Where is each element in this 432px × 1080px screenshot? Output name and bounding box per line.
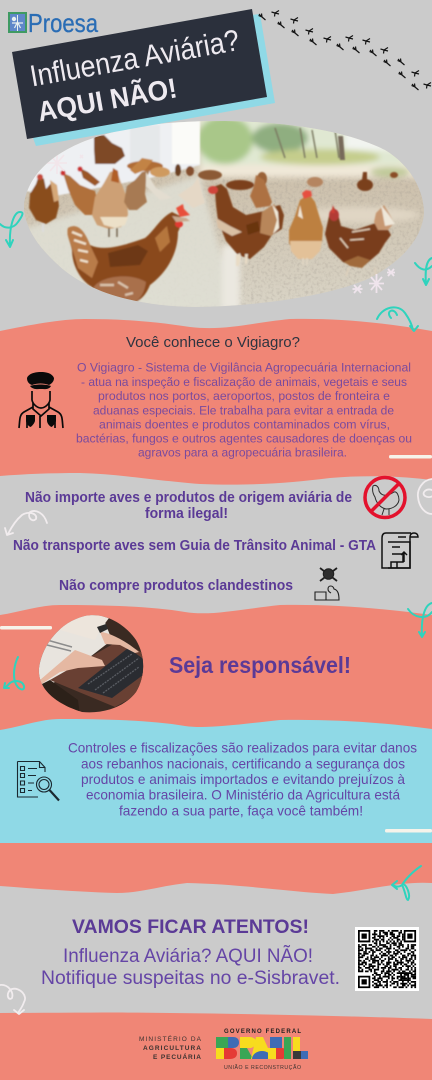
large hen	[67, 212, 181, 305]
building	[20, 118, 200, 196]
warning: do not import: forma ilegal!	[145, 506, 228, 522]
tan front hen	[288, 196, 324, 246]
left hen	[29, 175, 59, 224]
QR code	[355, 927, 419, 991]
text block: Vigiagro description: agravos para a agropecuária brasileira.	[138, 445, 347, 459]
photo: hens on a farm	[20, 116, 430, 310]
call to action text: Influenza Aviária? AQUI NÃO!	[63, 945, 313, 967]
band: cyan control panel	[0, 719, 432, 843]
logo wordmark: Proesa	[28, 8, 98, 38]
hen two	[63, 173, 99, 215]
text block: Vigiagro description: bactérias, fungos e outros agentes causadores de doenças ou	[76, 431, 412, 445]
text block: Vigiagro description: - atua na inspeção e fiscalização de animais, vegetais e seus	[81, 375, 407, 389]
decorative teal and white squiggles	[0, 212, 432, 1014]
sparkles on the photo	[48, 154, 84, 174]
icon: officer	[19, 372, 63, 428]
text block: controls description: produtos e animais importados e evitando prejuízos à	[81, 771, 405, 787]
white accent bar	[389, 455, 432, 458]
icon: prohibited chicken	[365, 478, 405, 518]
ministry wordmark: AGRICULTURA	[143, 1045, 201, 1052]
ministry wordmark	[139, 1034, 202, 1061]
white accent bar	[0, 626, 52, 630]
text block: controls description: aos rebanhos nacionais, certificando a segurança dos	[81, 755, 405, 771]
text block: Vigiagro description: O Vigiagro - Sistema de Vigilância Agropecuária Internacional	[77, 361, 411, 375]
heading: Seja responsável!: Seja responsável!	[169, 652, 351, 678]
sparkles: near photo bottom right	[352, 269, 395, 293]
icon: document route	[382, 533, 418, 568]
centre hen	[213, 184, 284, 259]
call to action text	[41, 917, 340, 989]
text block: controls description	[68, 740, 417, 818]
text block: Vigiagro description: produtos nos portos, aeroportos, postos de fronteira e	[98, 389, 390, 403]
text block: Vigiagro description: aduanas especiais. Ele trabalha para evitar a entrada de	[93, 403, 394, 417]
text block: controls description: Controles e fiscalizações são realizados para evitar danos	[68, 740, 417, 756]
logo: Proesa	[8, 8, 98, 38]
government logo	[216, 1029, 308, 1071]
title banner	[12, 9, 267, 139]
warning: do not import: Não importe aves e produtos de origem aviária de	[25, 490, 352, 506]
logo tagline: UNIÃO E RECONSTRUÇÃO	[224, 1064, 301, 1071]
white accent bar	[385, 829, 432, 832]
icon: skull and hacker	[315, 568, 339, 600]
icon: checklist with magnifier	[18, 762, 59, 800]
band: salmon Seja responsável panel	[0, 605, 432, 740]
title banner shadow	[33, 14, 275, 146]
logo icon: open book	[8, 12, 27, 33]
band: salmon footer	[0, 1013, 432, 1080]
logo letters	[216, 1037, 308, 1059]
call to action text: Notifique suspeitas no e-Sisbravet.	[41, 968, 340, 989]
back hen in the centre	[250, 175, 272, 208]
ministry wordmark: MINISTÉRIO DA	[139, 1034, 202, 1043]
text block: Vigiagro description: animais doentes e produtos contaminados com vírus,	[99, 417, 390, 431]
text block: controls description: economia brasileira. O Ministério da Agricultura está	[86, 787, 400, 803]
call to action text: VAMOS FICAR ATENTOS!	[72, 917, 309, 938]
distant hens	[94, 135, 125, 164]
title line 1: Influenza Aviária?	[27, 24, 242, 93]
text block: Vigiagro description	[76, 361, 412, 459]
warning: do not transport: Não transporte aves sem Guia de Trânsito Animal - GTA	[13, 538, 376, 554]
hen three tan	[92, 170, 128, 229]
title line 2: AQUI NÃO!	[35, 72, 179, 127]
dark front hen	[325, 206, 391, 267]
heading: Você conhece o Vigiagro?: Você conhece o Vigiagro?	[126, 334, 300, 351]
hen four	[124, 170, 150, 210]
bird footprints	[258, 10, 431, 90]
warning: do not buy: Não compre produtos clandestinos	[59, 578, 293, 594]
warning: do not import	[25, 490, 352, 522]
logo heading: GOVERNO FEDERAL	[224, 1029, 301, 1035]
band: salmon separator	[0, 843, 432, 894]
ministry wordmark: E PECUÁRIA	[153, 1052, 201, 1061]
text block: controls description: fazendo a sua parte, faça você também!	[119, 802, 363, 818]
photo: hands on keyboard	[38, 615, 144, 712]
band: salmon Vigiagro panel	[0, 319, 432, 485]
